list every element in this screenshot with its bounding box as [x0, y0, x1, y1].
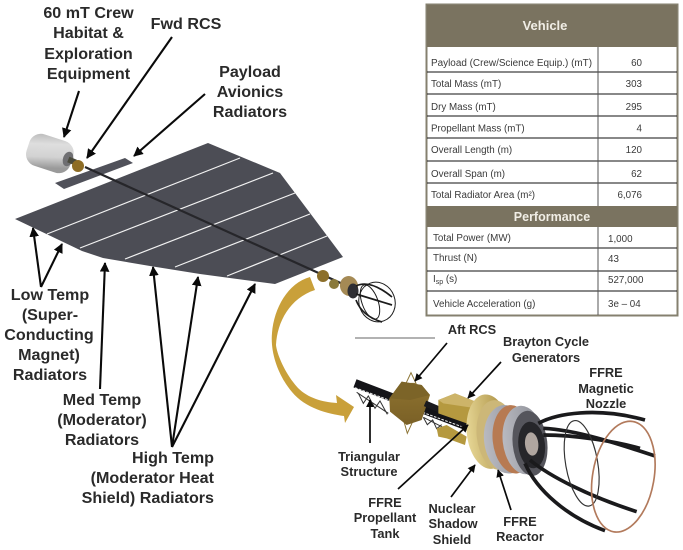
vehicle rows: Payload (Crew/Science Equip.) (mT) — [431, 58, 592, 69]
performance rows: sp — [436, 279, 443, 286]
triangular truss structure — [355, 383, 470, 430]
nuclear shadow shield ring — [463, 392, 520, 472]
label: high temp radiators: Shield) Radiators — [82, 489, 214, 507]
FFRE magnetic nozzle cage — [525, 413, 663, 537]
header: performance — [427, 206, 677, 227]
engine detail illustration — [355, 373, 663, 537]
FFRE reactor rings — [481, 403, 551, 478]
engine assembly overview — [317, 270, 401, 327]
label: aft RCS: Aft RCS — [448, 322, 497, 337]
performance rows: Vehicle Acceleration (g) — [433, 299, 535, 310]
label: high temp radiators: High Temp — [132, 449, 214, 467]
thin rule above detail view — [355, 337, 435, 339]
table grid — [427, 47, 677, 315]
vehicle rows: 295 — [626, 102, 643, 113]
label: med temp radiators: Radiators — [65, 431, 139, 449]
header: vehicle — [427, 5, 677, 47]
label: med temp radiators: Med Temp — [63, 391, 141, 409]
header: performance: Performance — [514, 210, 590, 224]
performance rows: 3e – 04 — [608, 299, 641, 310]
label: Brayton cycle generators: Brayton Cycle — [503, 334, 589, 349]
label: nuclear shadow shield: Shield — [433, 532, 471, 547]
label: high temp radiators: (Moderator Heat — [91, 469, 215, 487]
label: FFRE magnetic nozzle: Magnetic — [578, 381, 634, 396]
performance rows: Total Power (MW) — [433, 233, 511, 244]
vehicle rows: Overall Length (m) — [431, 145, 512, 156]
label: payload avionics radiators: Radiators — [213, 103, 287, 121]
label: nuclear shadow shield: Nuclear — [429, 501, 475, 516]
label: crew habitat: Equipment — [47, 65, 131, 83]
performance rows: (s) — [443, 274, 457, 285]
overview leader arrows — [33, 37, 255, 447]
label: low temp radiators: Conducting — [4, 326, 94, 344]
performance rows: 527,000 — [608, 275, 644, 286]
performance rows: I — [433, 274, 436, 285]
crew habitat module — [23, 131, 84, 176]
main radiator panel — [15, 143, 343, 284]
vehicle rows: Total Mass (mT) — [431, 79, 501, 90]
gold transition arrow — [272, 277, 354, 423]
label: FFRE magnetic nozzle: Nozzle — [586, 396, 626, 411]
label: Brayton cycle generators: Generators — [512, 350, 580, 365]
vehicle rows: 303 — [626, 79, 643, 90]
performance rows: 43 — [608, 254, 619, 265]
radiator segment dividers — [47, 158, 327, 276]
vehicle rows: 120 — [626, 145, 643, 156]
specification table — [426, 4, 678, 316]
label: low temp radiators: Low Temp — [11, 286, 89, 304]
label: payload avionics radiators: Avionics — [217, 83, 283, 101]
label: low temp radiators: Radiators — [13, 366, 87, 384]
central boom — [85, 167, 345, 285]
label: triangular structure: Triangular — [338, 449, 400, 464]
label: low temp radiators: Magnet) — [18, 346, 80, 364]
vehicle rows — [431, 58, 643, 201]
vehicle rows: Dry Mass (mT) — [431, 102, 496, 113]
label: FFRE magnetic nozzle: FFRE — [589, 365, 623, 380]
label: crew habitat: 60 mT Crew — [43, 4, 134, 22]
label: forward RCS: Fwd RCS — [151, 15, 222, 33]
Brayton cycle generators — [438, 393, 480, 423]
vehicle rows: 60 — [631, 58, 643, 69]
detail leader arrows — [370, 343, 511, 510]
vehicle rows: 4 — [637, 124, 643, 134]
vehicle overview: radiators and boom — [15, 131, 401, 327]
aft RCS block — [389, 373, 447, 433]
label: FFRE propellant tank: Propellant — [354, 510, 417, 525]
label: FFRE reactor: FFRE — [503, 514, 537, 529]
vehicle rows: 62 — [631, 169, 642, 180]
performance rows: 1,000 — [608, 234, 633, 245]
label: FFRE reactor: Reactor — [496, 529, 544, 544]
label: FFRE propellant tank: FFRE — [368, 495, 402, 510]
label: crew habitat: Habitat & — [53, 24, 124, 42]
performance rows: Thrust (N) — [433, 253, 477, 264]
label: triangular structure: Structure — [341, 464, 397, 479]
label: nuclear shadow shield: Shadow — [428, 516, 478, 531]
vehicle rows: Overall Span (m) — [431, 169, 505, 180]
performance rows — [433, 233, 644, 310]
white leader highlight — [450, 426, 468, 441]
vehicle rows: Total Radiator Area (m²) — [431, 190, 535, 201]
label: low temp radiators: (Super- — [22, 306, 78, 324]
vehicle rows: 6,076 — [617, 190, 643, 201]
FFRE propellant tank — [437, 425, 467, 445]
payload avionics radiator — [55, 158, 133, 189]
label: med temp radiators: (Moderator) — [57, 411, 147, 429]
label: payload avionics radiators: Payload — [219, 63, 281, 81]
label: crew habitat: Exploration — [44, 45, 133, 63]
header: vehicle: Vehicle — [523, 18, 567, 33]
label: FFRE propellant tank: Tank — [371, 526, 400, 541]
vehicle rows: Propellant Mass (mT) — [431, 124, 525, 134]
